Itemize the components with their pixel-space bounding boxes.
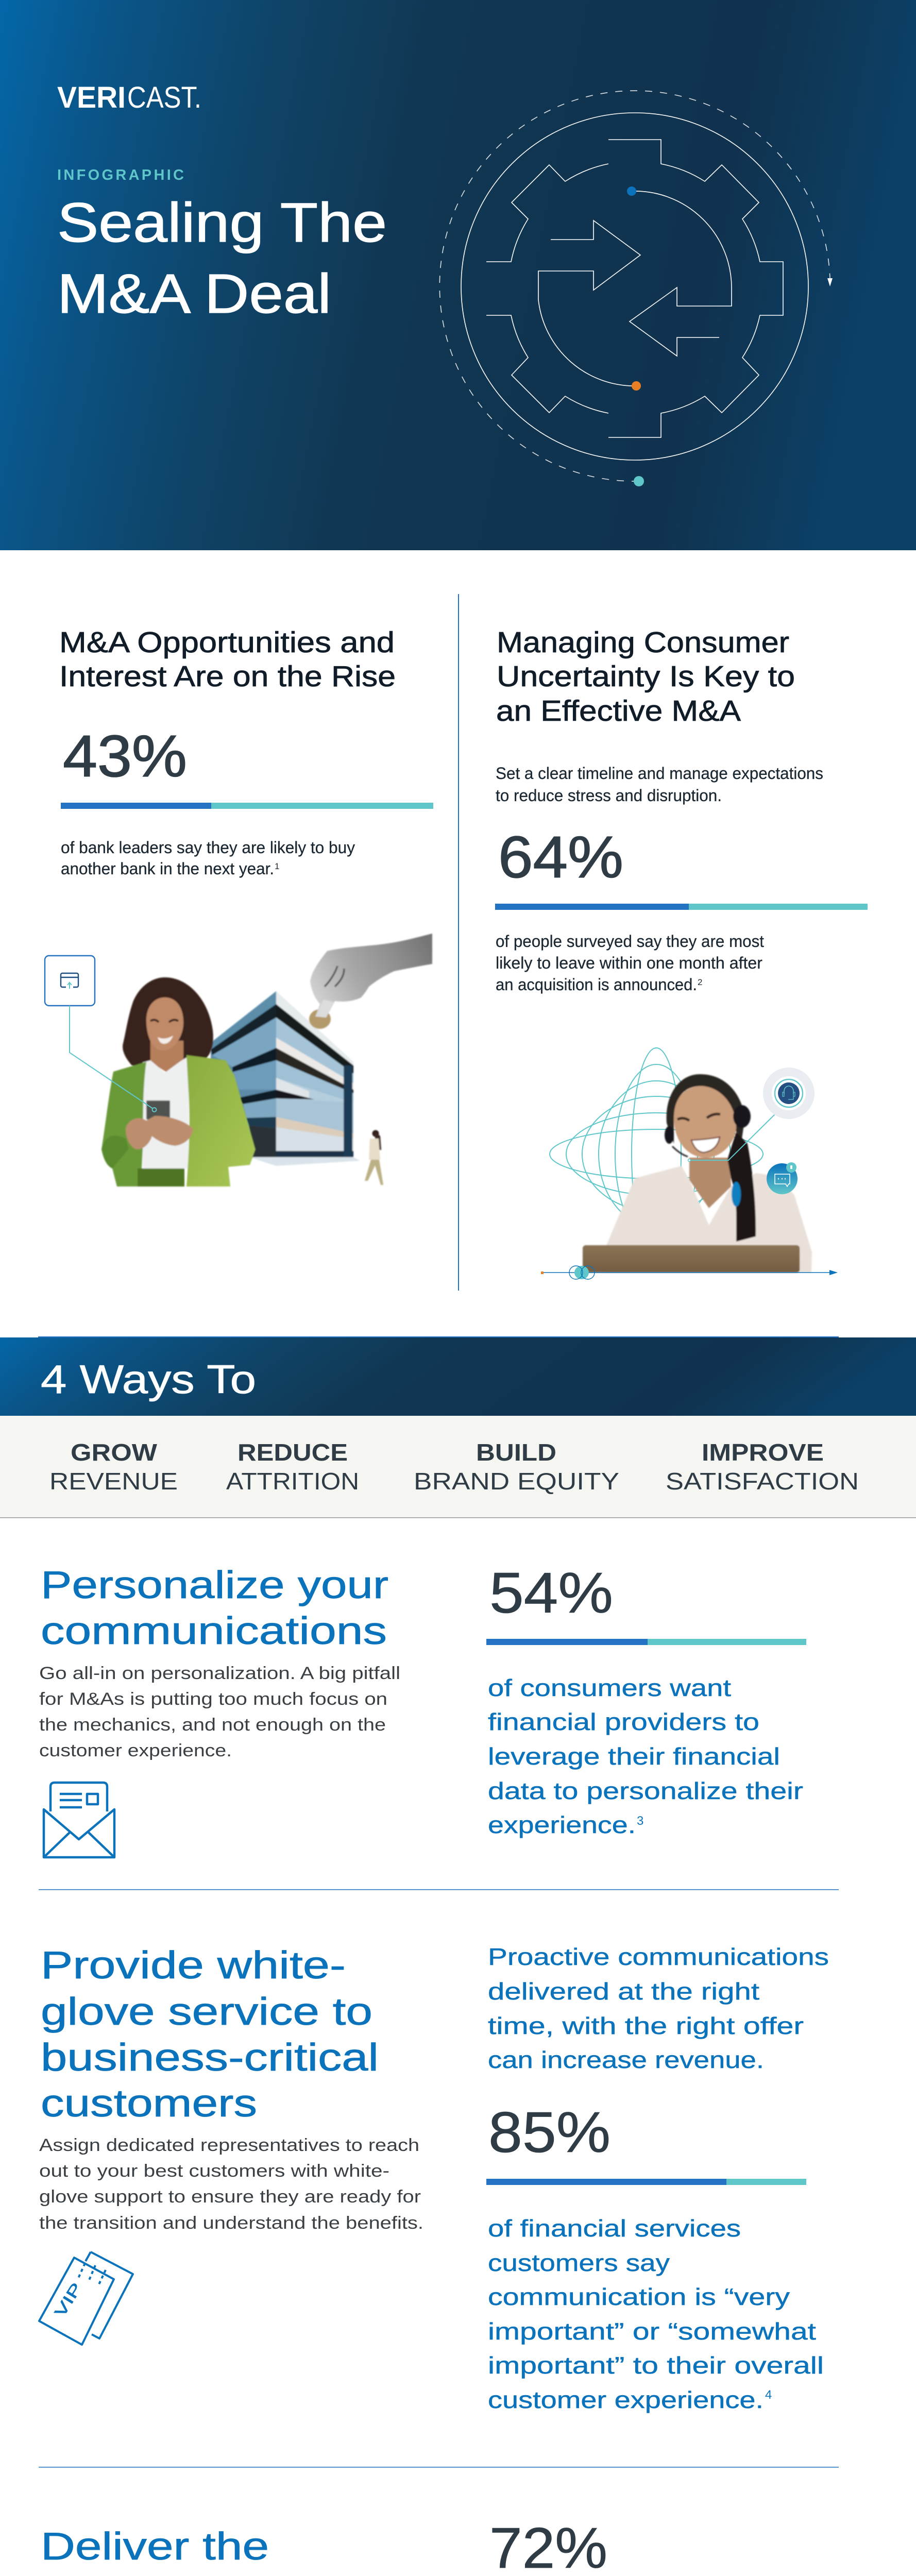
stat: 54%: 54% [489, 1561, 613, 1625]
stat description: 85%: of financial services [488, 2215, 741, 2242]
heading: personalize [41, 1563, 388, 1652]
divider: vertical rule between columns [458, 594, 459, 1291]
body text: white-glove: out to your best customers with white- [39, 2161, 389, 2181]
goal: build brand equity: BUILD [476, 1439, 556, 1466]
body text: white-glove: Assign dedicated representatives to reach [39, 2136, 419, 2155]
heading: white-glove: customers [41, 2081, 257, 2125]
progress bar: 43% [61, 803, 433, 809]
body text: personalize: customer experience. [39, 1741, 232, 1760]
stat description: bank leaders [61, 838, 355, 878]
panel: consistent brand experience [39, 2516, 824, 2576]
stat description: 85%: customer experience. [488, 2386, 764, 2413]
panel: personalize your communications [39, 1561, 806, 1857]
intro text: to reduce stress and disruption. [496, 786, 722, 805]
eyebrow: infographic: INFOGRAPHIC [57, 167, 184, 183]
stat description: 54%: financial providers to [488, 1708, 759, 1735]
callout connector line [70, 1006, 157, 1112]
agent with headset [603, 1074, 812, 1273]
heading: brand experience [41, 2524, 413, 2576]
stat description: people surveyed: of people surveyed say they are most [496, 932, 764, 951]
progress bar: 54% [486, 1639, 806, 1645]
heading: managing uncertainty: an Effective M&A [496, 694, 741, 727]
goal: improve satisfaction: SATISFACTION [666, 1468, 859, 1495]
heading: white-glove: business-critical [41, 2036, 379, 2079]
illustration: contact center agent [541, 1048, 838, 1279]
stat: 85%: 85% [488, 2100, 610, 2164]
heading: brand experience: Deliver the [41, 2524, 269, 2568]
stat description: bank leaders: of bank leaders say they are likely to buy [61, 838, 355, 857]
goal: build brand equity: BRAND EQUITY [414, 1468, 619, 1495]
goal: improve satisfaction: IMPROVE [702, 1439, 824, 1466]
divider [39, 2467, 839, 2468]
stat description: 85%: customers say [488, 2249, 670, 2276]
heading: M&A opportunities [59, 626, 396, 693]
building [211, 991, 360, 1166]
header banner [0, 0, 916, 550]
goal: improve satisfaction [666, 1439, 859, 1495]
icon: envelope with letter [44, 1783, 114, 1857]
stat description: 85%: important” or “somewhat [488, 2318, 816, 2345]
panel: managing consumer uncertainty [495, 626, 868, 1279]
body text: white-glove: the transition and understand the benefits. [39, 2213, 423, 2233]
stat description: 85%: 4 [765, 2388, 772, 2402]
heading: managing uncertainty: Uncertainty Is Key to [497, 660, 795, 693]
callout text: proactive communications [488, 1943, 829, 2073]
heading: M&A opportunities: Interest Are on the Rise [59, 660, 396, 693]
callout text: proactive communications: can increase revenue. [488, 2046, 764, 2073]
stat description: 85% [488, 2215, 824, 2413]
heading: white-glove [41, 1943, 379, 2125]
divider [39, 1889, 839, 1890]
stat description: people surveyed: likely to leave within one month after [496, 954, 762, 972]
goal: reduce attrition: ATTRITION [226, 1468, 359, 1495]
callout text: proactive communications: Proactive communications [488, 1943, 829, 1970]
body text: personalize: Go all-in on personalization. A big pitfall [39, 1664, 400, 1683]
Vericast logo: VERI [57, 81, 126, 114]
callout text: proactive communications: time, with the right offer [488, 2012, 804, 2039]
Vericast logo [57, 81, 201, 114]
body text: personalize: for M&As is putting too much focus on [39, 1689, 387, 1709]
hand dropping coin [309, 934, 432, 1029]
heading: personalize: Personalize your [41, 1563, 388, 1606]
progress bar: 64% [495, 904, 868, 910]
heading: white-glove: Provide white- [41, 1943, 346, 1987]
body text: white-glove [39, 2136, 423, 2233]
callout: headset badge [688, 1067, 815, 1161]
heading: white-glove: glove service to [41, 1990, 372, 2033]
icon: payment card callout [45, 956, 95, 1006]
timeline arrow [541, 1266, 838, 1279]
heading: M&A opportunities: M&A Opportunities and [59, 626, 395, 659]
goal: grow revenue [49, 1439, 178, 1495]
illustration: gear with arrows [439, 91, 833, 486]
stat description: 54%: leverage their financial [488, 1743, 780, 1770]
body text: personalize [39, 1664, 400, 1760]
body text: white-glove: glove support to ensure they are ready for [39, 2187, 421, 2207]
progress bar: 85% [486, 2179, 806, 2185]
intro text: Set a clear timeline and manage expectations [496, 764, 823, 783]
heading: personalize: communications [41, 1609, 387, 1652]
laptop [583, 1245, 800, 1273]
stat description: bank leaders: another bank in the next year. [61, 859, 274, 878]
stat: 43%: 43% [63, 724, 187, 789]
goal: build brand equity [414, 1439, 619, 1495]
stat description: 54%: 3 [637, 1814, 643, 1828]
wireframe globe [550, 1048, 763, 1260]
intro text [496, 764, 823, 805]
stat description: 54%: data to personalize their [488, 1777, 803, 1804]
icon: VIP tickets: VIP [52, 2280, 86, 2320]
stat description: people surveyed: an acquisition is announced. [496, 975, 697, 994]
goal: grow revenue: GROW [71, 1439, 158, 1466]
banner: 4 ways to [0, 1336, 916, 1416]
goal: reduce attrition [226, 1439, 359, 1495]
heading: managing uncertainty: Managing Consumer [497, 626, 789, 659]
panel: M&A opportunities [45, 626, 433, 1187]
panel: white-glove service [39, 1943, 829, 2413]
illustration: woman with phone, building and hand [45, 934, 432, 1187]
heading: 4 ways to: 4 Ways To [41, 1357, 256, 1402]
stat description: 85%: communication is “very [488, 2283, 790, 2310]
stat: 64%: 64% [498, 825, 623, 890]
woman in green blazer with phone [70, 977, 256, 1187]
panel: four goals band [0, 1416, 916, 1518]
icon: chat bubble badge [767, 1162, 798, 1194]
stat description: 85%: important” to their overall [488, 2352, 824, 2379]
small walking figure [365, 1130, 383, 1185]
stat description: 54%: of consumers want [488, 1674, 731, 1701]
stat description: 54%: experience. [488, 1811, 636, 1838]
title [57, 191, 387, 325]
title: Sealing The [57, 191, 387, 253]
goal: reduce attrition: REDUCE [238, 1439, 348, 1466]
stat description: people surveyed [496, 932, 764, 994]
callout text: proactive communications: delivered at the right [488, 1978, 759, 2005]
goal: grow revenue: REVENUE [49, 1468, 178, 1495]
stat description: bank leaders: 1 [275, 861, 279, 871]
Vericast logo: CAST. [127, 81, 201, 114]
stat description: 54% [488, 1674, 803, 1838]
title: M&A Deal [57, 262, 331, 325]
stat description: people surveyed: 2 [698, 977, 702, 987]
icon: VIP tickets [39, 2252, 133, 2345]
body text: personalize: the mechanics, and not enough on the [39, 1715, 386, 1735]
heading: managing uncertainty [496, 626, 795, 727]
